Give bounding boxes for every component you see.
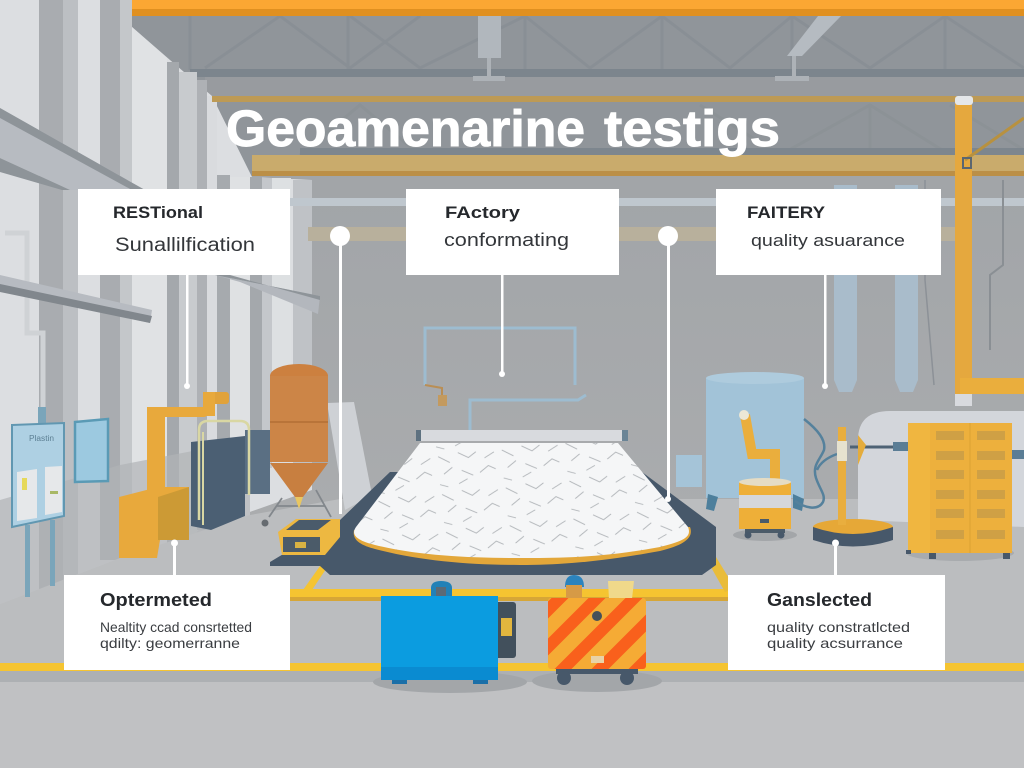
card: Ganslected: quality acsurrance — [767, 635, 903, 651]
second ceiling beam — [212, 96, 1024, 102]
connector lines — [171, 226, 839, 575]
card: Ganslected — [728, 575, 945, 670]
card: Optermeted: Nealtity ccad consrtetted — [100, 619, 252, 635]
card: RESTional — [78, 189, 290, 275]
dark cabinet with pale tube — [191, 421, 270, 530]
yellow drum machine — [733, 410, 797, 541]
card: Optermeted: qdilty: geomerranne — [100, 635, 240, 651]
blue pipe frame — [425, 328, 586, 430]
left wall steel beams — [0, 108, 320, 323]
main yellow crossbeam — [252, 155, 1024, 176]
yellow cabinet — [906, 423, 1024, 561]
rail above geomembrane — [416, 430, 628, 441]
small yellow box machine — [278, 519, 340, 555]
floor — [0, 499, 1024, 768]
yellow robot arm machine — [119, 392, 229, 558]
title: Geoamenarine — [226, 100, 585, 157]
blue tank — [676, 372, 804, 511]
dark platform — [270, 472, 716, 575]
title — [226, 100, 780, 157]
blue equipment case — [373, 581, 527, 693]
hanging blue-grey columns — [834, 180, 1003, 392]
orange hopper on stand — [262, 364, 331, 526]
card: FAITERY: quality asuarance — [751, 231, 905, 250]
ceiling with trusses — [132, 16, 1024, 176]
card: Ganslected: quality constratlcted — [767, 619, 910, 635]
top orange beam — [132, 0, 1024, 16]
card: FActory — [406, 189, 619, 275]
left wall — [0, 0, 312, 604]
card: FAITERY — [716, 189, 941, 275]
geomembrane sheet — [354, 443, 691, 565]
left information board — [12, 407, 64, 597]
stand with hoses — [795, 419, 908, 546]
title: testigs — [604, 100, 780, 157]
glass panel — [327, 402, 372, 510]
card: Ganslected: Ganslected — [767, 590, 872, 610]
yellow support column — [955, 96, 1024, 406]
card: Optermeted: Optermeted — [100, 590, 212, 610]
card: FActory: FActory — [445, 203, 521, 222]
card: FActory: conformating — [444, 230, 569, 250]
large white machine — [858, 411, 1024, 527]
left information board: Plastin — [29, 434, 54, 443]
card: RESTional: Sunallilfication — [115, 235, 255, 256]
card: Optermeted — [64, 575, 290, 670]
background: back wall — [0, 0, 1024, 520]
pipe valve — [425, 385, 447, 406]
ceiling light fixtures — [473, 16, 841, 81]
card: FAITERY: FAITERY — [747, 203, 826, 222]
wall window panel — [75, 419, 108, 482]
striped hazard cart with worker — [532, 575, 662, 692]
wall pipes — [290, 198, 1024, 241]
floor safety lines — [0, 557, 1024, 671]
card: RESTional: RESTional — [113, 203, 203, 222]
